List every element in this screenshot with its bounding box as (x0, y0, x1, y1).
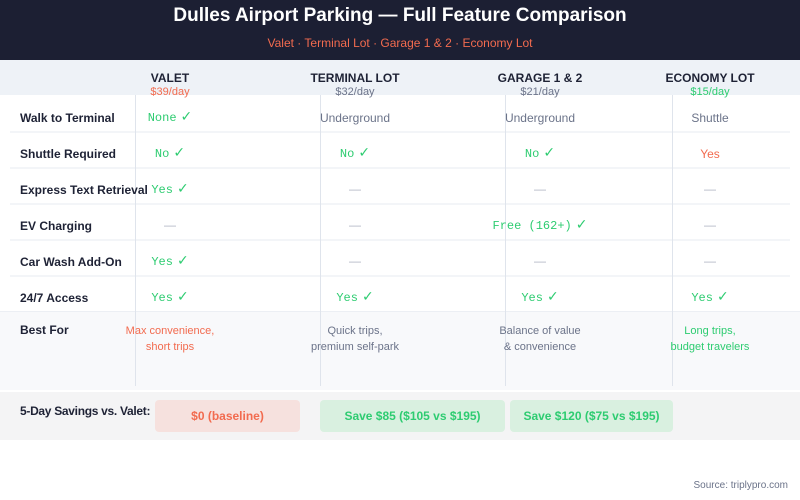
col: valet (150, 71, 190, 98)
row: shuttle: Yes (700, 147, 720, 161)
row: best for (20, 323, 749, 353)
row: 24/7: 24/7 Access (20, 291, 88, 305)
header (0, 0, 800, 60)
col: economy: ECONOMY LOT (665, 71, 755, 85)
col: economy: $15/day (690, 86, 730, 98)
source: Source: triplypro.com (694, 480, 788, 491)
row: 24/7: Yes ✓ (336, 289, 374, 305)
row: 24/7: Yes ✓ (691, 289, 729, 305)
col: garage: $21/day (520, 86, 560, 98)
row: best for: Quick trips, (327, 325, 382, 337)
col: terminal: TERMINAL LOT (310, 71, 400, 85)
row: express text: Express Text Retrieval (20, 183, 148, 197)
col: garage (498, 71, 582, 98)
row: car wash: — (704, 254, 716, 268)
box: valet baseline (155, 400, 300, 432)
col: valet: $39/day (150, 86, 190, 98)
row: express text: — (349, 182, 361, 196)
row: walk to terminal (20, 109, 729, 125)
col: valet: VALET (151, 71, 189, 85)
row: best for: Long trips, (684, 325, 736, 337)
row: shuttle: No ✓ (340, 145, 370, 161)
col: terminal (310, 71, 400, 98)
box: terminal savings: Save $85 ($105 vs $195) (344, 409, 481, 423)
box: valet baseline: $0 (baseline) (191, 409, 264, 423)
row: EV: — (349, 218, 361, 232)
row: best for: premium self-park (311, 341, 399, 353)
row: express text (20, 181, 716, 197)
savings label: 5-Day Savings vs. Valet: (20, 404, 150, 418)
row: walk to terminal: Walk to Terminal (20, 111, 115, 125)
row: best for: Best For (20, 323, 69, 337)
row: shuttle: Shuttle Required (20, 147, 116, 161)
row: best for: Balance of value (499, 325, 581, 337)
subtitle: Valet · Terminal Lot · Garage 1 & 2 · Economy Lot (267, 36, 533, 50)
column header band (0, 60, 800, 95)
row: express text: Yes ✓ (151, 181, 189, 197)
row: best for: budget travelers (671, 341, 749, 353)
row: walk to terminal: None ✓ (148, 109, 192, 125)
row: walk to terminal: Shuttle (691, 111, 729, 125)
row: shuttle: No ✓ (525, 145, 555, 161)
row: car wash: — (349, 254, 361, 268)
row: car wash: — (534, 254, 546, 268)
box: garage savings: Save $120 ($75 vs $195) (523, 409, 660, 423)
row: EV: — (164, 218, 176, 232)
row: EV: Free (162+) ✓ (493, 217, 587, 233)
row: express text: — (704, 182, 716, 196)
row: EV: EV Charging (20, 219, 92, 233)
row: best for: Max convenience, (126, 325, 214, 337)
col: economy (665, 71, 755, 98)
box: terminal savings (320, 400, 505, 432)
row: best for: short trips (146, 341, 194, 353)
row: car wash: Yes ✓ (151, 253, 189, 269)
best for band (0, 311, 800, 390)
row: car wash (20, 253, 716, 269)
row: EV: — (704, 218, 716, 232)
savings band (0, 392, 800, 440)
row: 24/7 (20, 289, 729, 305)
row: best for: & convenience (504, 341, 576, 353)
row: walk to terminal: Underground (505, 111, 575, 125)
row: shuttle: No ✓ (155, 145, 185, 161)
col: terminal: $32/day (335, 86, 375, 98)
row: 24/7: Yes ✓ (151, 289, 189, 305)
title: Dulles Airport Parking — Full Feature Comparison (173, 5, 627, 26)
row: express text: — (534, 182, 546, 196)
col: garage: GARAGE 1 & 2 (498, 71, 582, 85)
row: 24/7: Yes ✓ (521, 289, 559, 305)
box: garage savings (510, 400, 673, 432)
row: EV (20, 217, 716, 233)
row: shuttle (20, 145, 720, 161)
row: walk to terminal: Underground (320, 111, 390, 125)
row: car wash: Car Wash Add-On (20, 255, 122, 269)
